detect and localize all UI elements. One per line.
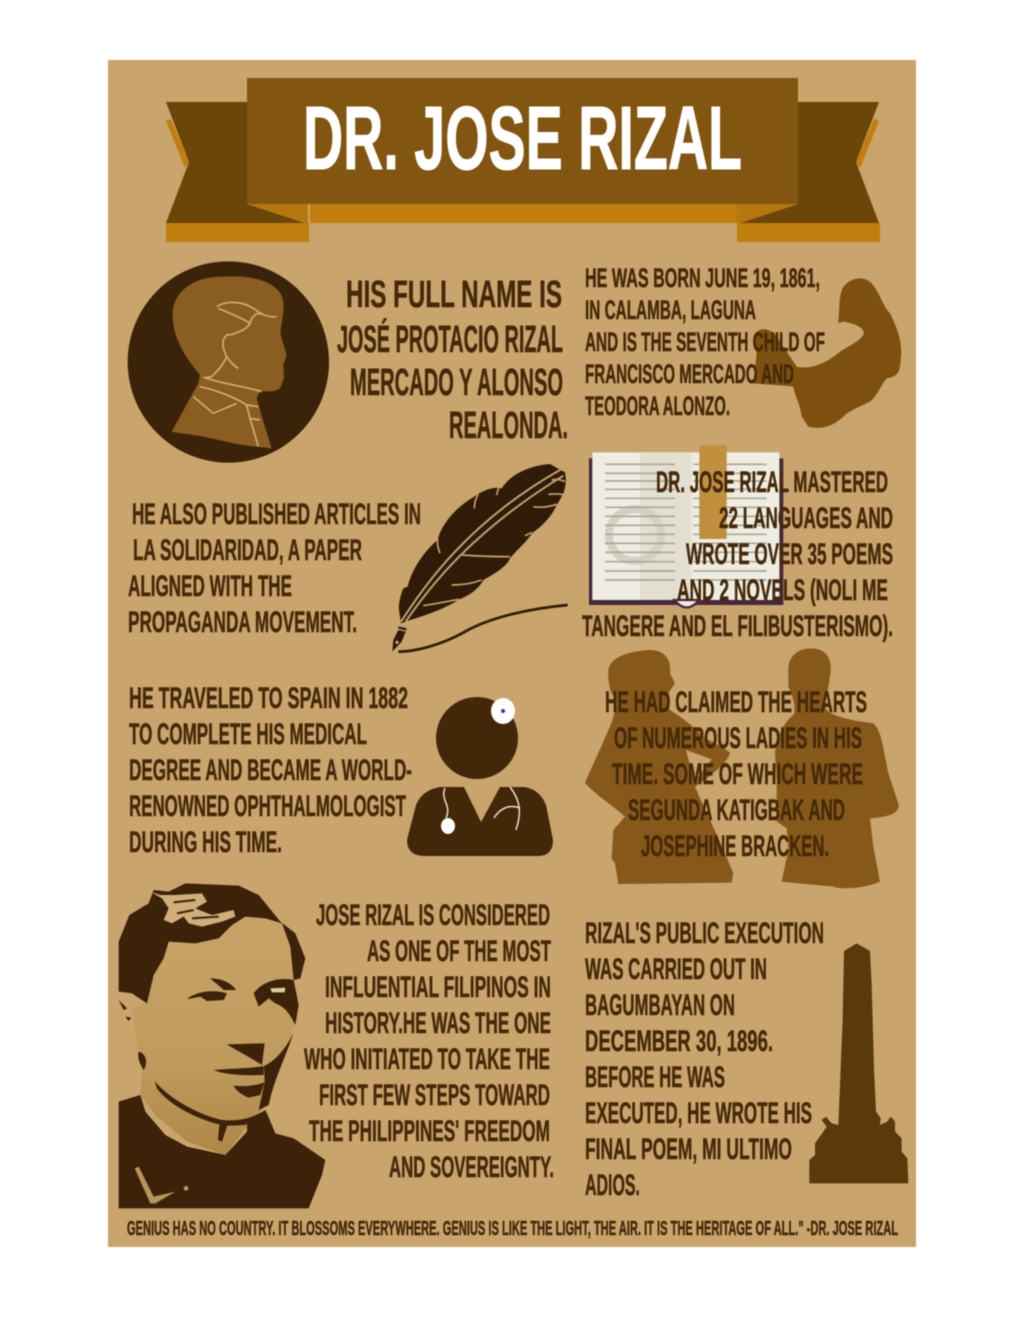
text: execution: BAGUMBAYAN ON xyxy=(585,989,735,1022)
hair xyxy=(119,883,305,1003)
text: ladies xyxy=(605,686,867,863)
text: influence xyxy=(304,899,554,1184)
poster background xyxy=(108,60,916,1247)
text: full name xyxy=(337,274,568,447)
text: birth: IN CALAMBA, LAGUNA xyxy=(585,295,756,325)
text: influence: FIRST FEW STEPS TOWARD xyxy=(319,1079,550,1112)
text: full name: MERCADO Y ALONSO xyxy=(350,362,563,404)
text: birth: HE WAS BORN JUNE 19, 1861, xyxy=(585,263,820,293)
text: influence: JOSE RIZAL IS CONSIDERED xyxy=(316,899,550,932)
text: execution: FINAL POEM, MI ULTIMO xyxy=(585,1133,792,1166)
icon: quill feather xyxy=(392,464,568,652)
text: languages xyxy=(582,466,893,643)
text: ladies: JOSEPHINE BRACKEN. xyxy=(641,830,829,863)
text: La Solidaridad: ALIGNED WITH THE xyxy=(128,570,292,603)
woman xyxy=(585,650,733,884)
title banner xyxy=(166,78,880,242)
jacket xyxy=(119,1095,325,1208)
icon: medallion profile xyxy=(128,261,329,463)
text: birth xyxy=(585,263,825,421)
text: influence: AS ONE OF THE MOST xyxy=(367,935,551,968)
icon: Rizal monument xyxy=(809,943,908,1183)
text: full name: REALONDA. xyxy=(449,405,568,447)
text: Spain: DURING HIS TIME. xyxy=(129,826,282,859)
text: execution: DECEMBER 30, 1896. xyxy=(585,1025,773,1058)
text: La Solidaridad: HE ALSO PUBLISHED ARTICLES IN xyxy=(132,498,421,531)
icon: doctor xyxy=(407,697,553,856)
text: languages: 22 LANGUAGES AND xyxy=(719,502,893,535)
icon: couple silhouette xyxy=(585,648,899,888)
lapel highlight xyxy=(135,1167,175,1203)
face xyxy=(132,917,295,1155)
facial features xyxy=(119,978,299,1142)
text: full name: JOSÉ PROTACIO RIZAL xyxy=(337,317,563,361)
text: influence: AND SOVEREIGNTY. xyxy=(389,1151,554,1184)
hair streaks xyxy=(174,900,219,918)
banner: orange back ribbon xyxy=(166,119,880,242)
text: influence: WHO INITIATED TO TAKE THE xyxy=(304,1043,550,1076)
man xyxy=(775,648,899,888)
text: La Solidaridad: PROPAGANDA MOVEMENT. xyxy=(128,606,357,639)
text: influence: THE PHILIPPINES' FREEDOM xyxy=(309,1115,550,1148)
icon: open book xyxy=(589,445,783,607)
text: execution xyxy=(585,917,824,1202)
banner: main panel xyxy=(247,78,798,204)
text: full name: HIS FULL NAME IS xyxy=(346,274,562,316)
banner: fold highlights xyxy=(247,204,798,223)
icon: Laguna map xyxy=(753,278,901,428)
text: ladies: SEGUNDA KATIGBAK AND xyxy=(628,794,845,827)
text: execution: ADIOS. xyxy=(585,1169,640,1202)
text: La Solidaridad xyxy=(128,498,421,639)
text: Spain: DEGREE AND BECAME A WORLD- xyxy=(129,754,412,787)
text: Spain: RENOWNED OPHTHALMOLOGIST xyxy=(129,790,406,823)
banner: left and right tails xyxy=(166,102,879,223)
text: Spain: HE TRAVELED TO SPAIN IN 1882 xyxy=(129,682,408,715)
text: influence: INFLUENTIAL FILIPINOS IN xyxy=(325,971,551,1004)
text: birth: AND IS THE SEVENTH CHILD OF xyxy=(585,327,825,357)
icon: Rizal portrait xyxy=(119,883,325,1208)
text: birth: TEODORA ALONZO. xyxy=(585,391,730,421)
title: DR. JOSE RIZAL xyxy=(303,89,742,189)
text: Spain xyxy=(129,682,412,859)
text: execution: WAS CARRIED OUT IN xyxy=(585,953,767,986)
text: execution: BEFORE HE WAS xyxy=(585,1061,725,1094)
text: execution: RIZAL'S PUBLIC EXECUTION xyxy=(585,917,824,950)
text: birth: FRANCISCO MERCADO AND xyxy=(585,359,794,389)
text: Spain: TO COMPLETE HIS MEDICAL xyxy=(129,718,367,751)
text: influence: HISTORY.HE WAS THE ONE xyxy=(325,1007,551,1040)
text: execution: EXECUTED, HE WROTE HIS xyxy=(585,1097,812,1130)
hair highlights xyxy=(150,892,235,927)
text: La Solidaridad: LA SOLIDARIDAD, A PAPER xyxy=(133,534,362,567)
eye highlight xyxy=(270,988,285,992)
